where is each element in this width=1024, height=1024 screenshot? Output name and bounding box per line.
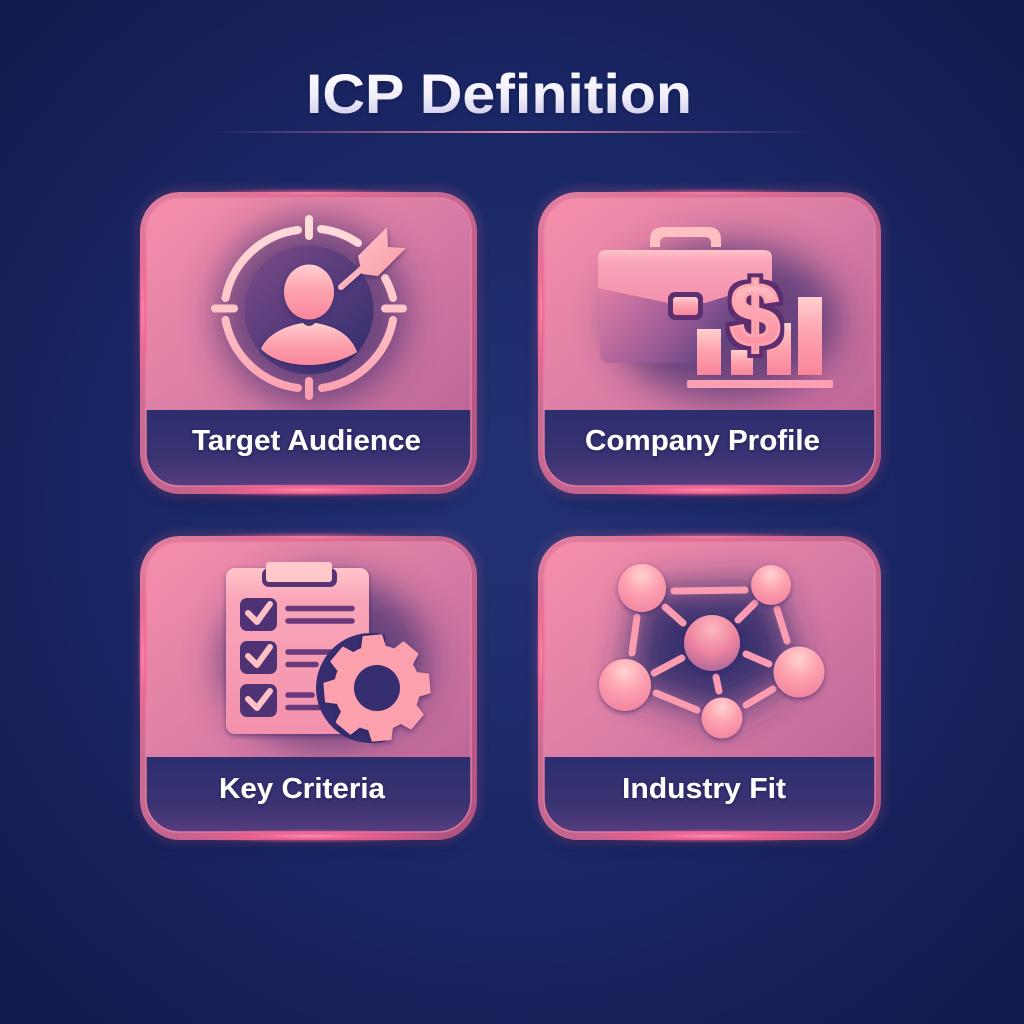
panel: target audience [138,188,477,500]
panel: key criteria [138,532,477,846]
briefcase clasp [668,292,703,320]
checkboxes [240,598,277,717]
label: Key Criteria [219,773,386,805]
briefcase lower body [600,285,772,363]
target ring [215,219,403,396]
clipboard [226,568,369,734]
chart baseline [687,380,833,388]
network nodes [599,564,824,738]
icon: dollar sign: $ [730,266,780,366]
clipboard clip [262,568,337,587]
person shoulders [261,323,357,365]
network links [632,590,787,710]
title underline [210,131,816,133]
bar chart [697,297,822,375]
label: Company Profile [585,425,820,457]
icon: gear [324,635,430,741]
briefcase flap [598,250,772,303]
list lines [288,608,352,708]
icon: network of nodes [599,564,824,738]
title: ICP Definition [306,62,692,125]
label: Industry Fit [622,773,786,805]
label: Target Audience [192,425,421,457]
icon: briefcase with dollar and bars [598,227,833,388]
arrow [341,227,406,287]
panel: industry fit [536,532,881,846]
person head [284,264,334,320]
panel: company profile [536,188,881,500]
icon: target with person and arrow [215,219,406,396]
target disc [244,246,374,374]
gear backing [316,633,385,743]
gear hole [354,665,400,711]
check marks [248,604,270,708]
briefcase handle [650,227,721,247]
icon: clipboard with gear [226,562,430,743]
